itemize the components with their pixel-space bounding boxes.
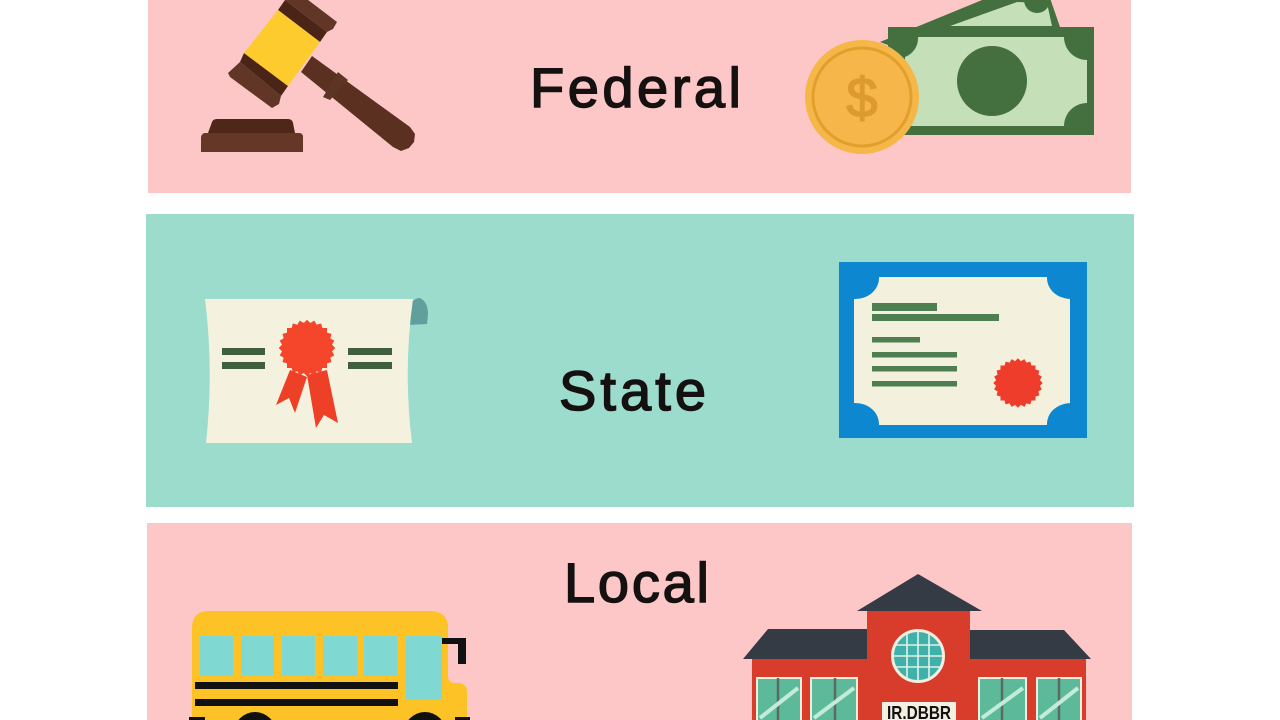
heading: local: Local xyxy=(564,551,709,614)
icon: gavel xyxy=(201,0,415,152)
panel: state xyxy=(146,214,1134,507)
icon: certificate xyxy=(839,262,1087,438)
panel: local xyxy=(147,523,1132,720)
icon: money and coin: $ xyxy=(846,66,878,129)
heading: state: State xyxy=(559,359,706,422)
icon: money and coin xyxy=(805,0,1094,154)
panel: federal xyxy=(148,0,1131,193)
icon: school building xyxy=(743,574,1091,720)
icon: diploma scroll xyxy=(205,298,428,443)
heading: federal: Federal xyxy=(530,56,741,119)
icon: school bus xyxy=(189,611,470,720)
